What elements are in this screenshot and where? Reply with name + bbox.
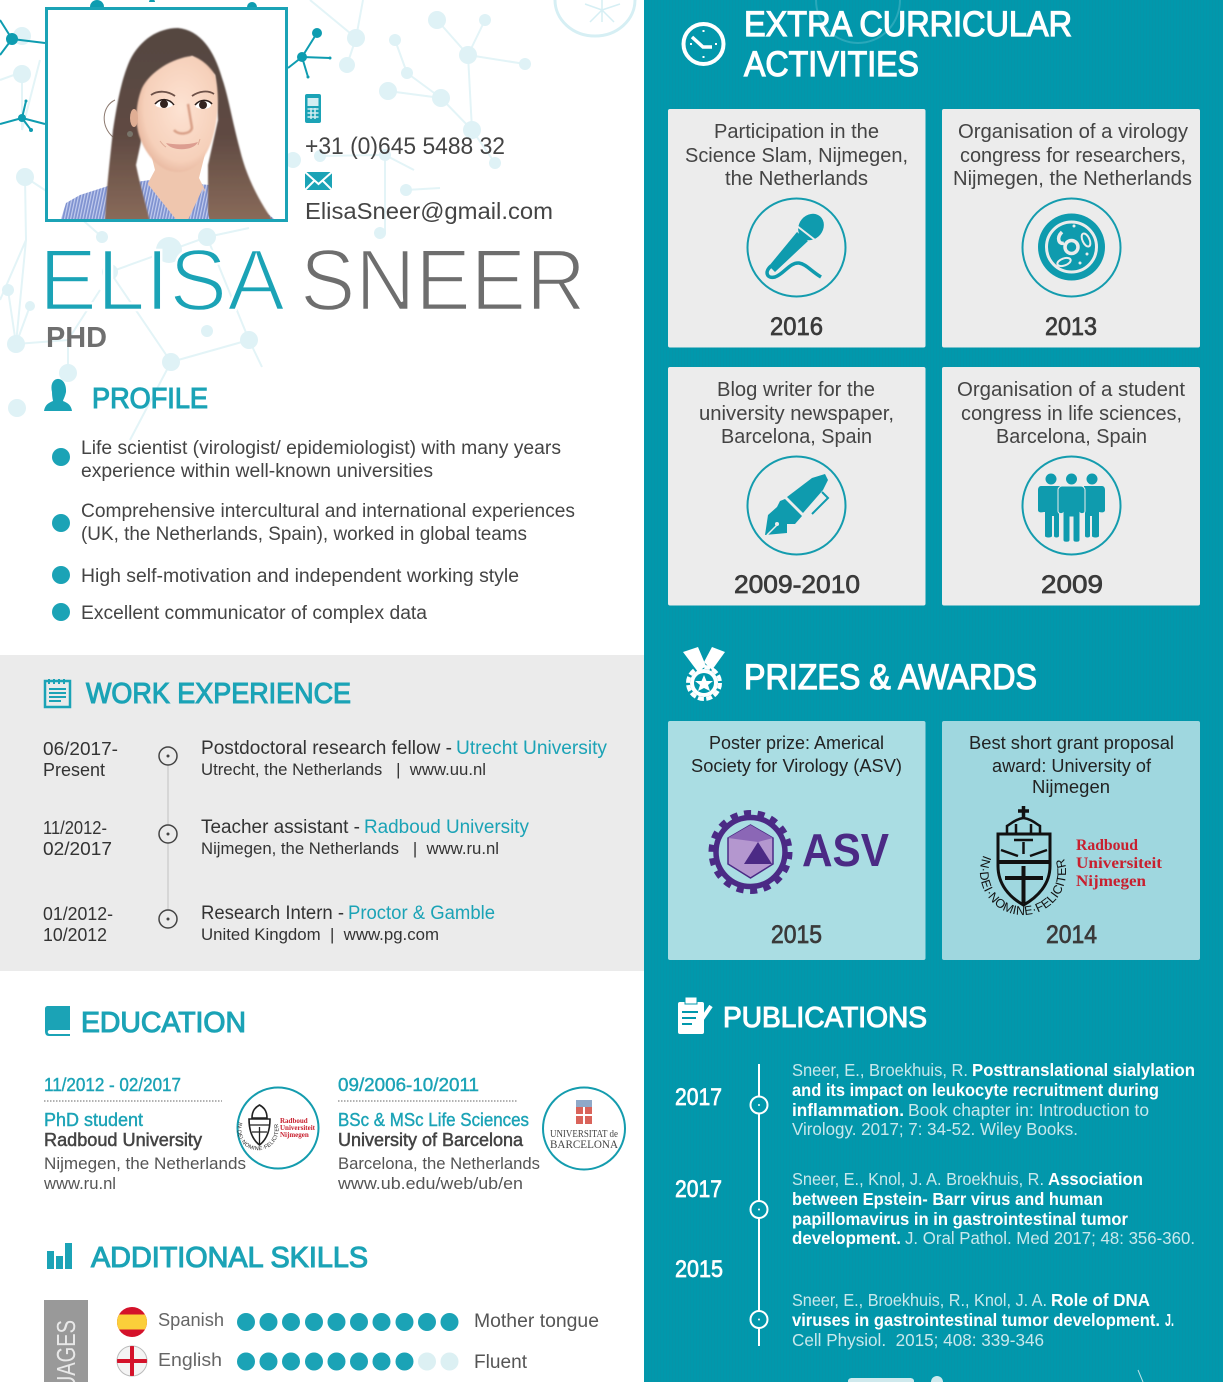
card: student congress: Barcelona, Spain [996, 426, 1147, 448]
language: English [158, 1350, 528, 1373]
bullets [52, 448, 70, 621]
publication 2015 DNA viruses [675, 1256, 1174, 1350]
job: research intern: 01/2012- [43, 904, 113, 924]
logo: Radboud University seal: Radboud [1076, 837, 1138, 854]
molecule accents in teal [0, 0, 332, 132]
logo: University of Barcelona: UNIVERSITAT de [550, 1129, 619, 1140]
card: ASV poster prize: Poster prize: Americal [709, 733, 884, 753]
job: postdoc: 06/2017- [43, 739, 118, 759]
icon: person [44, 379, 72, 411]
degree: PhD: www.ru.nl [43, 1174, 116, 1193]
card: ASV poster prize: Society for Virology (ASV) [691, 756, 902, 776]
job: postdoc: Present [43, 760, 105, 780]
icon: microphone [767, 209, 829, 277]
card: Radboud grant award: Best short grant proposal [969, 733, 1174, 753]
language: Spanish: Spanish [158, 1310, 224, 1330]
card: science slam [668, 109, 926, 348]
job: research intern [43, 903, 495, 945]
logo: University of Barcelona [543, 1088, 625, 1170]
publication 2017 sialylation: 2017 [675, 1084, 722, 1111]
mouth [166, 142, 198, 149]
heading: PROFILE [92, 383, 208, 415]
timeline [159, 747, 177, 928]
logo: Radboud small [236, 1086, 320, 1170]
profile text: experience within well-known universities [81, 461, 433, 482]
name title: SNEER [300, 232, 586, 329]
degree: PHD [46, 322, 107, 354]
flag: England [117, 1346, 147, 1376]
logo: Radboud small: Universiteit [280, 1124, 316, 1132]
profile text: Excellent communicator of complex data [81, 603, 427, 624]
profile text: High self-motivation and independent working style [81, 566, 519, 587]
publication 2015 DNA viruses: 2015 [675, 1256, 723, 1283]
degree: PhD: PhD student [44, 1110, 143, 1130]
panel: additional skills [44, 1242, 599, 1382]
icon: fountain pen [765, 474, 828, 535]
right column background [644, 0, 1223, 1382]
icon: document with pen [678, 997, 711, 1034]
icon: book [45, 1006, 70, 1036]
publication 2015 DNA viruses: Sneer, E., Broekhuis, R., Knol, J. A. [792, 1290, 1047, 1310]
heading: EDUCATION [81, 1007, 246, 1039]
degree: BSc MSc: 09/2006-10/2011 [338, 1075, 479, 1095]
collar [147, 183, 210, 222]
publication 2017 Epstein-Barr: Association [1048, 1169, 1143, 1189]
email: ElisaSneer@gmail.com [305, 198, 553, 224]
flag: Spain [117, 1307, 147, 1337]
icon: phone [305, 94, 321, 123]
publication 2017 Epstein-Barr [675, 1169, 1195, 1248]
job: postdoc: Postdoctoral research fellow - [201, 738, 452, 759]
job: teacher assistant: Nijmegen, the Netherlands | www.ru.nl [201, 839, 499, 858]
icon: medal [683, 647, 725, 699]
icon: group of people [1038, 474, 1105, 542]
panel: work experience [0, 655, 644, 971]
logo: Radboud small: Radboud [280, 1117, 308, 1125]
profile text [81, 438, 575, 624]
phone number: +31 (0)645 5488 32 [305, 133, 505, 160]
logo: Radboud University seal: Universiteit [1076, 855, 1163, 872]
degree: BSc MSc [337, 1075, 540, 1193]
logo: University of Barcelona: BARCELONA [550, 1139, 619, 1151]
card: student congress: congress in life sciences, [961, 403, 1182, 425]
job: postdoc: Utrecht, the Netherlands | www.uu.nl [201, 760, 486, 779]
degree: PhD: Radboud University [44, 1130, 202, 1150]
shirt [60, 180, 278, 222]
panel: education [43, 1006, 626, 1193]
publication 2017 sialylation: Posttranslational sialylation [972, 1060, 1195, 1080]
publication 2017 Epstein-Barr: 2017 [675, 1176, 722, 1203]
publication 2017 Epstein-Barr: development. [792, 1228, 901, 1248]
heading [744, 5, 1072, 84]
molecule background pattern [0, 0, 531, 440]
card: science slam: Science Slam, Nijmegen, [685, 145, 908, 167]
publication 2015 DNA viruses: Cell Physiol. 2015; 408: 339-346 [792, 1330, 1044, 1350]
job: research intern: United Kingdom | www.pg.com [201, 925, 439, 944]
panel: profile [44, 379, 575, 624]
logo: Radboud University seal: IN·DEI·NOMINE·FELICITER [980, 856, 1066, 916]
petri dish decoration [555, 0, 635, 36]
publication 2015 DNA viruses: Role of DNA [1051, 1290, 1150, 1310]
job: teacher assistant [43, 817, 529, 859]
card: virology congress: 2013 [1045, 313, 1097, 341]
logo: Radboud small: Nijmegen [280, 1131, 309, 1139]
stray hair loop [104, 100, 115, 137]
card: virology congress: congress for researchers, [960, 145, 1186, 167]
logo: Radboud University seal [980, 806, 1163, 916]
degree: BSc MSc: BSc & MSc Life Sciences [338, 1110, 529, 1130]
job: teacher assistant: 02/2017 [43, 839, 112, 859]
publication 2017 Epstein-Barr: papillomavirus in in gastrointestinal tumor [792, 1209, 1128, 1229]
card: ASV poster prize: 2015 [771, 921, 822, 949]
publication 2017 sialylation: Sneer, E., Broekhuis, R. [792, 1060, 968, 1080]
card: Radboud grant award: Nijmegen [1032, 777, 1110, 797]
panel: publications [675, 997, 1195, 1350]
publication 2015 DNA viruses: viruses in gastrointestinal tumor development. [792, 1310, 1160, 1330]
job: teacher assistant: 11/2012- [43, 818, 107, 838]
publication 2017 Epstein-Barr: Sneer, E., Knol, J. A. Broekhuis, R. [792, 1169, 1044, 1189]
language: English: Fluent [474, 1352, 528, 1373]
logo: Radboud small: IN·DEI·NOMINE·FELICITER [237, 1122, 278, 1150]
name title: ELISA [39, 232, 285, 329]
job: postdoc [43, 738, 608, 780]
icon: notepad [45, 679, 70, 707]
heading: ACTIVITIES [744, 45, 919, 84]
ear and earring [130, 109, 138, 127]
card: blog writer: university newspaper, [699, 403, 894, 425]
eyes [155, 100, 212, 109]
card: science slam: the Netherlands [725, 168, 868, 190]
card: Radboud grant award: 2014 [1046, 921, 1097, 949]
card: student congress: Organisation of a student [957, 379, 1185, 401]
job: postdoc: Utrecht University [456, 738, 608, 759]
degree: BSc MSc: Barcelona, the Netherlands [338, 1154, 540, 1173]
card: science slam: Participation in the [714, 121, 879, 143]
card: student congress: 2009 [1041, 571, 1103, 599]
icon: clock [684, 24, 724, 64]
publication 2017 Epstein-Barr: between Epstein- Barr virus and human [792, 1189, 1103, 1209]
language: Spanish [158, 1310, 599, 1332]
face [136, 56, 218, 172]
degree: PhD: 11/2012 - 02/2017 [44, 1075, 181, 1095]
card: Radboud grant award [942, 721, 1200, 960]
degree: BSc MSc: www.ub.edu/web/ub/en [337, 1174, 523, 1193]
publication 2017 sialylation: inflammation. [792, 1100, 904, 1120]
language: English: English [158, 1350, 222, 1370]
nose [174, 104, 192, 134]
publication 2017 Epstein-Barr: J. Oral Pathol. Med 2017; 48: 356-360. [905, 1228, 1195, 1248]
logo: ASV: ASV [802, 824, 889, 876]
card: blog writer: 2009-2010 [734, 571, 860, 599]
card: blog writer: Barcelona, Spain [721, 426, 872, 448]
heading: ADDITIONAL SKILLS [91, 1242, 368, 1274]
languages tab [44, 1300, 88, 1382]
heading: WORK EXPERIENCE [86, 678, 351, 710]
icon: bar chart [47, 1243, 72, 1269]
job: teacher assistant: Teacher assistant - [201, 817, 360, 838]
card: student congress [942, 367, 1200, 606]
heading: PRIZES & AWARDS [744, 658, 1037, 697]
language: Spanish: Mother tongue [474, 1311, 599, 1332]
job: research intern: Research Intern - [201, 903, 344, 924]
hair [105, 28, 274, 222]
publication 2015 DNA viruses: J. [1165, 1310, 1174, 1330]
job: research intern: 10/2012 [43, 925, 107, 945]
card: virology congress: Nijmegen, the Netherlands [953, 168, 1192, 190]
job: research intern: Proctor & Gamble [348, 903, 495, 924]
card: ASV poster prize [668, 721, 926, 960]
card: virology congress [942, 109, 1200, 348]
card: Radboud grant award: award: University of [992, 756, 1152, 776]
icon: envelope [305, 172, 332, 190]
profile text: Comprehensive intercultural and international experiences [81, 501, 575, 522]
publication 2017 sialylation: and its impact on leukocyte recruitment during [792, 1080, 1159, 1100]
job: teacher assistant: Radboud University [364, 817, 529, 838]
heading: EXTRA CURRICULAR [744, 5, 1072, 44]
degree: PhD [43, 1075, 246, 1193]
card: virology congress: Organisation of a virology [958, 121, 1188, 143]
panel: prizes and awards [668, 647, 1200, 960]
publication 2017 sialylation: Book chapter in: Introduction to [908, 1100, 1149, 1120]
degree: BSc MSc: University of Barcelona [338, 1130, 524, 1150]
publication 2017 sialylation: Virology. 2017; 7: 34-52. Wiley Books. [792, 1119, 1078, 1139]
eyebrows [151, 92, 214, 96]
publication 2017 sialylation [675, 1060, 1195, 1139]
photo frame [46, 8, 286, 220]
card: science slam: 2016 [770, 313, 823, 341]
neck [147, 154, 205, 219]
profile text: Life scientist (virologist/ epidemiologist) with many years [81, 438, 561, 459]
logo: ASV [712, 814, 889, 890]
card: blog writer: Blog writer for the [717, 379, 875, 401]
portrait photo [46, 8, 286, 222]
name title [39, 232, 586, 329]
timeline [750, 1064, 768, 1346]
panel: extra curricular activities [668, 5, 1200, 606]
degree: PhD: Nijmegen, the Netherlands [44, 1154, 246, 1173]
card: blog writer [668, 367, 926, 606]
logo: Radboud University seal: Nijmegen [1076, 873, 1146, 890]
heading: PUBLICATIONS [723, 1002, 927, 1034]
icon: cell [1038, 214, 1105, 280]
profile text: (UK, the Netherlands, Spain), worked in global teams [81, 524, 527, 545]
